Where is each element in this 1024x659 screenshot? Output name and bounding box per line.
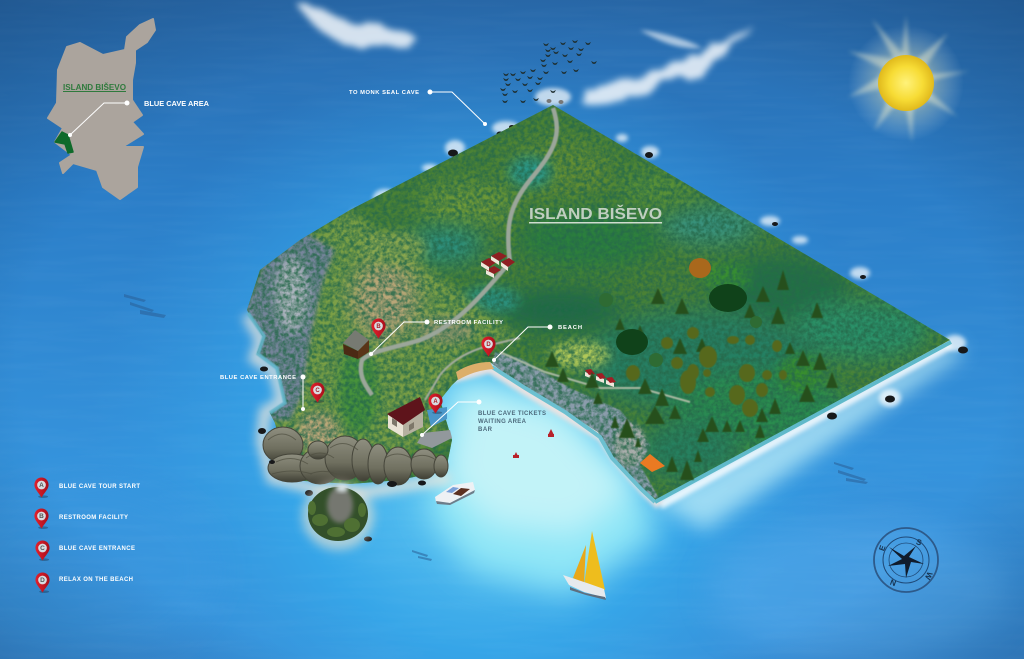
inset map: BLUE CAVE AREA <box>144 99 210 108</box>
hamlet: red-roofed houses <box>481 252 515 278</box>
callout: tickets: BAR <box>478 427 493 433</box>
legend item C: BLUE CAVE ENTRANCE <box>59 546 135 552</box>
ticket house <box>387 397 425 437</box>
legend item D: D <box>40 577 45 584</box>
shed <box>343 330 369 359</box>
boat <box>435 482 475 505</box>
texture <box>230 95 960 505</box>
map pin B <box>371 318 386 339</box>
callout: tickets <box>420 400 546 437</box>
legend item B: RESTROOM FACILITY <box>59 515 128 521</box>
compass <box>874 528 938 592</box>
western rock cliffs <box>245 232 335 420</box>
compass: W <box>923 570 934 582</box>
compass: S <box>915 537 923 548</box>
compass: E <box>877 544 888 552</box>
bay: light water <box>247 315 965 595</box>
jetty <box>417 430 452 448</box>
callout: beach: BEACH <box>558 325 582 331</box>
callout: beach <box>492 324 582 362</box>
legend item B <box>34 508 128 529</box>
map pin C <box>310 382 325 403</box>
clouds <box>295 2 757 103</box>
island land mass <box>230 95 960 505</box>
rock shadows <box>258 366 426 542</box>
tent <box>640 454 665 472</box>
callout: blue cave entrance <box>220 374 306 411</box>
map pin C: C <box>315 388 320 394</box>
autumn tree <box>689 258 711 278</box>
western hillside <box>270 210 517 455</box>
west cliff edge <box>248 313 285 413</box>
shoreline foam and rocks along the north and east coast <box>349 88 968 420</box>
legend item C: C <box>40 545 45 552</box>
callout: blue cave entrance: BLUE CAVE ENTRANCE <box>220 375 296 381</box>
rock strata <box>268 434 436 476</box>
birds flock <box>500 40 597 103</box>
callout: restroom <box>369 320 503 356</box>
water beside jetty <box>427 407 447 427</box>
legend item D <box>35 572 133 593</box>
south bay cliff rock <box>492 352 660 500</box>
map pin B: B <box>376 324 381 330</box>
callout: tickets: BLUE CAVE TICKETS <box>478 411 546 417</box>
school of fish <box>124 294 868 561</box>
south bay ledge <box>456 342 951 502</box>
callout: tickets: WAITING AREA <box>478 419 527 425</box>
inset map <box>48 19 210 199</box>
legend item C <box>35 540 135 561</box>
callout: monk seal cave: TO MONK SEAL CAVE <box>349 90 419 96</box>
callout: monk seal cave <box>349 90 487 126</box>
islet <box>302 482 374 550</box>
map pin A <box>428 394 443 414</box>
forest trees <box>545 270 838 480</box>
beach houses <box>585 369 616 387</box>
legend <box>34 478 140 593</box>
legend item B: B <box>39 513 44 520</box>
road: lower paths <box>425 338 690 402</box>
map pin A: A <box>433 399 438 405</box>
large dark trees <box>599 284 762 367</box>
compass: N <box>889 577 897 588</box>
teal and dark vegetation zones <box>407 140 930 480</box>
legend item A: A <box>39 482 44 489</box>
map pin D: D <box>486 342 491 348</box>
sailboat <box>563 531 606 600</box>
legend item A <box>34 478 140 498</box>
road: main trail <box>361 108 557 395</box>
map pin D <box>481 336 496 357</box>
callout: restroom: RESTROOM FACILITY <box>434 320 503 326</box>
sun <box>848 15 970 143</box>
buoys <box>513 429 554 458</box>
legend item D: RELAX ON THE BEACH <box>59 577 133 583</box>
western rocks <box>263 427 448 485</box>
inset map: ISLAND BIŠEVO <box>63 81 126 92</box>
island title: ISLAND BIŠEVO <box>529 204 662 223</box>
legend item A: BLUE CAVE TOUR START <box>59 484 140 490</box>
